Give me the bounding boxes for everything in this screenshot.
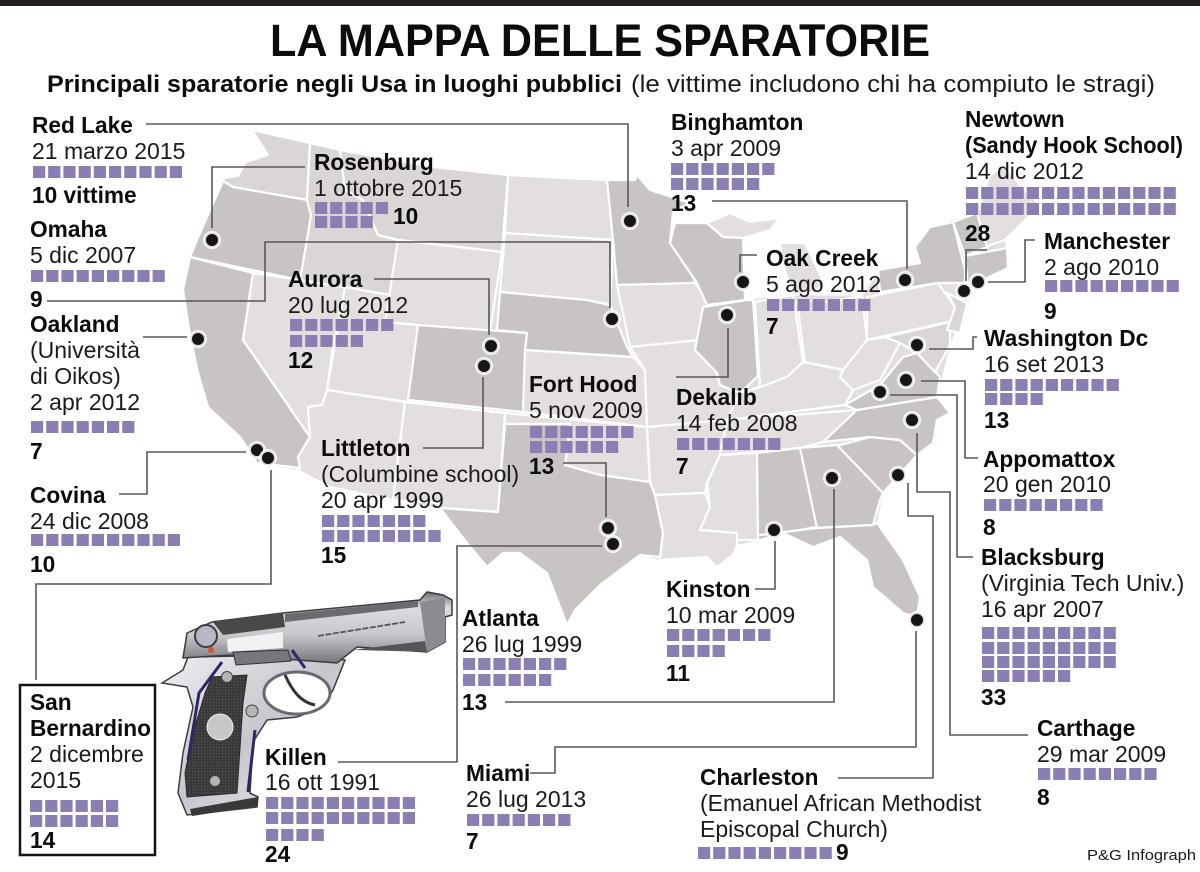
label: Blacksburg: 16 apr 2007 (981, 596, 1104, 622)
state: Vermont and New Hampshire (953, 213, 987, 256)
state: New York (878, 222, 965, 292)
pistol medallion (207, 714, 233, 740)
label: Charleston: 9 (836, 839, 849, 865)
state: Washington (223, 130, 310, 200)
label: Littleton: (Columbine school) (321, 461, 519, 487)
pistol screws (210, 672, 258, 786)
label: Oakland (30, 311, 140, 464)
subtitle note: (le vittime includono chi ha compiuto le stragi) (631, 71, 1155, 98)
state: South Dakota (500, 233, 613, 305)
label: Manchester: 2 ago 2010 (1044, 254, 1159, 280)
state: Kansas (523, 350, 647, 427)
label: Newtown (965, 106, 1183, 246)
label: Newtown: Newtown (965, 106, 1065, 132)
label: Red Lake (32, 112, 185, 208)
label: Appomattox: Appomattox (983, 446, 1116, 472)
label: Blacksburg: Blacksburg (981, 544, 1105, 570)
state: Kentucky (727, 362, 853, 420)
label: Carthage (1037, 715, 1166, 810)
pistol engraved marking (318, 622, 405, 636)
label: Killen (265, 744, 415, 867)
pistol magazine base (190, 797, 258, 816)
state: Texas (440, 424, 663, 625)
label: Aurora: 12 (288, 347, 313, 373)
label: Newtown: 14 dic 2012 (965, 158, 1084, 184)
label: Fort Hood: 13 (529, 453, 554, 479)
state: Arkansas (647, 420, 727, 495)
label: Oak Creek: 5 ago 2012 (766, 271, 881, 297)
callout: San Bernardino (20, 685, 155, 855)
state: North Dakota (505, 175, 613, 240)
pistol takedown lever (233, 650, 291, 665)
label: Fort Hood (529, 371, 643, 479)
label: Atlanta: Atlanta (462, 605, 539, 631)
callout: San Bernardino: 14 (30, 827, 56, 853)
state: Idaho (300, 143, 400, 295)
label: Kinston: 10 mar 2009 (666, 602, 795, 628)
label: Atlanta: 13 (462, 689, 487, 715)
state: Georgia (800, 445, 883, 528)
label: Blacksburg: (Virginia Tech Univ.) (981, 570, 1184, 596)
label: Miami (466, 760, 586, 854)
label: Oak Creek: Oak Creek (766, 245, 879, 271)
callout: San Bernardino: 2 dicembre (30, 741, 144, 767)
pistol upper barrel edge (285, 601, 418, 622)
callout: San Bernardino: 2015 (30, 767, 81, 793)
label: Appomattox (983, 446, 1116, 540)
label: Covina: Covina (30, 482, 106, 508)
pistol slide (183, 592, 452, 663)
leader: Oak Creek (740, 255, 757, 272)
label: Dekalib: 14 feb 2008 (676, 410, 798, 436)
label: Oakland: di Oikos) (30, 363, 121, 389)
label: Littleton (321, 435, 519, 568)
label: Charleston: Episcopal Church) (700, 816, 888, 842)
state: Wyoming (385, 240, 502, 332)
label: Omaha: 5 dic 2007 (30, 242, 136, 268)
label: Oakland: 2 apr 2012 (30, 389, 140, 415)
incident location dots (190, 214, 986, 628)
label: Carthage: Carthage (1037, 715, 1135, 741)
label: Carthage: 8 (1037, 784, 1050, 810)
label: Dekalib: 7 (676, 453, 689, 479)
label: Killen: 24 (265, 841, 291, 867)
label: Charleston: Charleston (700, 764, 819, 790)
state: Minnesota (607, 175, 695, 285)
state: Illinois (695, 300, 758, 393)
label: Killen: 16 ott 1991 (265, 769, 380, 795)
label: Manchester: 9 (1044, 298, 1057, 324)
label: Binghamton (671, 109, 803, 216)
state: Ohio (797, 296, 867, 370)
label: Newtown: 28 (965, 220, 990, 246)
illustration: pistol (162, 592, 452, 816)
label: Rosenburg: 1 ottobre 2015 (314, 175, 462, 201)
label: Kinston (666, 576, 795, 686)
label: Aurora (288, 266, 408, 373)
label: Fort Hood: 5 nov 2009 (529, 397, 643, 423)
state: North Carolina (823, 397, 950, 455)
pistol navy accents (188, 650, 305, 792)
label: Binghamton: Binghamton (671, 109, 803, 135)
label: Appomattox: 20 gen 2010 (983, 471, 1111, 497)
label: Oak Creek: 7 (766, 313, 779, 339)
label: Littleton: 20 apr 1999 (321, 487, 444, 513)
state: Louisiana (655, 493, 737, 567)
callout: San Bernardino: San (30, 689, 72, 715)
leader: Kinston (755, 541, 775, 589)
label: Washington Dc: Washington Dc (984, 325, 1148, 351)
state: Arizona (297, 390, 405, 500)
label: Oakland: 7 (30, 438, 43, 464)
label: Carthage: 29 mar 2009 (1037, 741, 1166, 767)
leader: Appomattox (921, 381, 978, 458)
state: Missouri (630, 340, 740, 427)
label: Charleston: (Emanuel African Methodist (700, 790, 982, 816)
label: Appomattox: 8 (983, 514, 996, 540)
label: Omaha: Omaha (30, 216, 107, 242)
top black bar (0, 0, 1200, 6)
label: Kinston: Kinston (666, 576, 750, 602)
label: Oakland: Oakland (30, 311, 120, 337)
state: Maine (977, 165, 1040, 247)
label: Oakland: (Università (30, 337, 140, 363)
state: Utah (327, 287, 418, 402)
state: Colorado (408, 325, 527, 412)
label: Binghamton: 13 (671, 190, 696, 216)
source credit: P&G Infograph (1087, 847, 1196, 864)
label: Manchester (1044, 228, 1179, 324)
label: Washington Dc: 16 set 2013 (984, 351, 1104, 377)
label: Atlanta: 26 lug 1999 (462, 631, 582, 657)
leader: Miami (530, 631, 916, 773)
label: Red Lake: 21 marzo 2015 (32, 138, 185, 164)
label: Blacksburg: 33 (981, 684, 1006, 710)
label: Red Lake: 10 vittime (32, 182, 137, 208)
label: Covina: 24 dic 2008 (30, 508, 149, 534)
pistol rear dark slide strip (213, 613, 285, 635)
state: New Jersey (947, 293, 967, 333)
subtitle bold part: Principali sparatorie negli Usa in luoghi pubblici (47, 71, 622, 98)
leader: Newtown (966, 250, 987, 281)
label: Blacksburg (981, 544, 1184, 710)
label: Omaha (30, 216, 165, 312)
label: Killen: Killen (265, 744, 327, 770)
leader: Aurora (374, 279, 489, 335)
label: Miami: Miami (466, 760, 530, 786)
state: Tennessee (720, 410, 857, 455)
state: Michigan lower (780, 243, 825, 295)
leader: Dekalib (676, 328, 728, 377)
state: Florida (760, 523, 920, 617)
state: Nevada (243, 273, 345, 437)
leader: Red Lake (146, 124, 628, 207)
label: Kinston: 11 (666, 660, 690, 686)
state: Wisconsin (670, 223, 745, 305)
leader: Manchester (988, 240, 1035, 282)
state: Oregon (190, 181, 311, 280)
leader: Covina (119, 452, 246, 494)
leader: Rosenburg (212, 167, 305, 228)
label: Washington Dc: 13 (984, 407, 1009, 433)
leader: Oakland (143, 336, 187, 338)
pistol muzzle block (420, 598, 445, 652)
state: Maryland and Delaware (885, 322, 950, 372)
pistol trigger guard opening (264, 672, 330, 714)
label: Dekalib (676, 384, 798, 479)
leader: Carthage (917, 433, 1028, 735)
label: Fort Hood: Fort Hood (529, 371, 637, 397)
label: Littleton: 15 (321, 542, 346, 568)
leader: Binghamton (712, 201, 907, 269)
pistol lower slide streak (352, 641, 427, 652)
label: Red Lake: Red Lake (32, 112, 133, 138)
leader: Blacksburg (890, 395, 973, 557)
label: Aurora: 20 lug 2012 (288, 292, 408, 318)
state: Iowa (617, 283, 715, 347)
label: Charleston (698, 764, 982, 865)
label: Dekalib: Dekalib (676, 384, 757, 410)
label: Newtown: (Sandy Hook School) (965, 132, 1183, 158)
pistol hammer (195, 625, 217, 647)
leader: Omaha (47, 242, 610, 308)
label: Oak Creek (766, 245, 881, 339)
label: Covina (30, 482, 180, 577)
label: Rosenburg: 10 (393, 203, 418, 229)
leader: Littleton (423, 377, 483, 448)
state: Mississippi (700, 453, 758, 540)
label: Omaha: 9 (30, 286, 43, 312)
state: Pennsylvania (867, 283, 957, 340)
state: Michigan upper (707, 213, 780, 238)
state: New Mexico (393, 402, 505, 512)
leader: Fort Hood (563, 463, 606, 517)
label: Rosenburg (314, 149, 462, 229)
state: California (183, 257, 310, 468)
label: Atlanta (462, 605, 582, 715)
label: Manchester: Manchester (1044, 228, 1170, 254)
leader: Washington Dc (929, 337, 977, 349)
leader: Charleston (838, 483, 933, 778)
label: Rosenburg: Rosenburg (314, 149, 434, 175)
state: Virginia (845, 353, 940, 410)
label: Washington Dc (984, 325, 1148, 433)
label: Miami: 26 lug 2013 (466, 786, 586, 812)
label: Binghamton: 3 apr 2009 (671, 135, 781, 161)
callout: San Bernardino: Bernardino (30, 715, 151, 741)
leader: San Bernardino (36, 470, 271, 680)
state: Montana (340, 150, 508, 252)
state: Connecticut and Massachusetts (965, 248, 1008, 287)
pistol red safety dot (208, 647, 214, 653)
state: Indiana (755, 295, 803, 387)
label: Aurora: Aurora (288, 266, 363, 292)
label: Covina: 10 (30, 551, 55, 577)
map base silhouette (183, 130, 1040, 625)
leader: Atlanta (505, 489, 834, 702)
leader: Killen (338, 546, 602, 762)
pistol serrations (227, 632, 283, 652)
label: Miami: 7 (466, 828, 479, 854)
leader lines connecting labels to map points (36, 124, 1035, 778)
label: Littleton: Littleton (321, 435, 410, 461)
pistol frame and grip (162, 655, 345, 815)
state: Alabama (757, 448, 817, 540)
pistol trigger (285, 675, 315, 705)
pistol grip panel (185, 675, 247, 797)
map of the United States (183, 130, 1040, 625)
subtitle (47, 71, 1155, 98)
state: Oklahoma (505, 413, 650, 482)
title: LA MAPPA DELLE SPARATORIE (270, 15, 930, 66)
state: West Virginia (840, 337, 900, 390)
state: Nebraska (497, 292, 633, 357)
state: South Carolina (837, 437, 917, 493)
